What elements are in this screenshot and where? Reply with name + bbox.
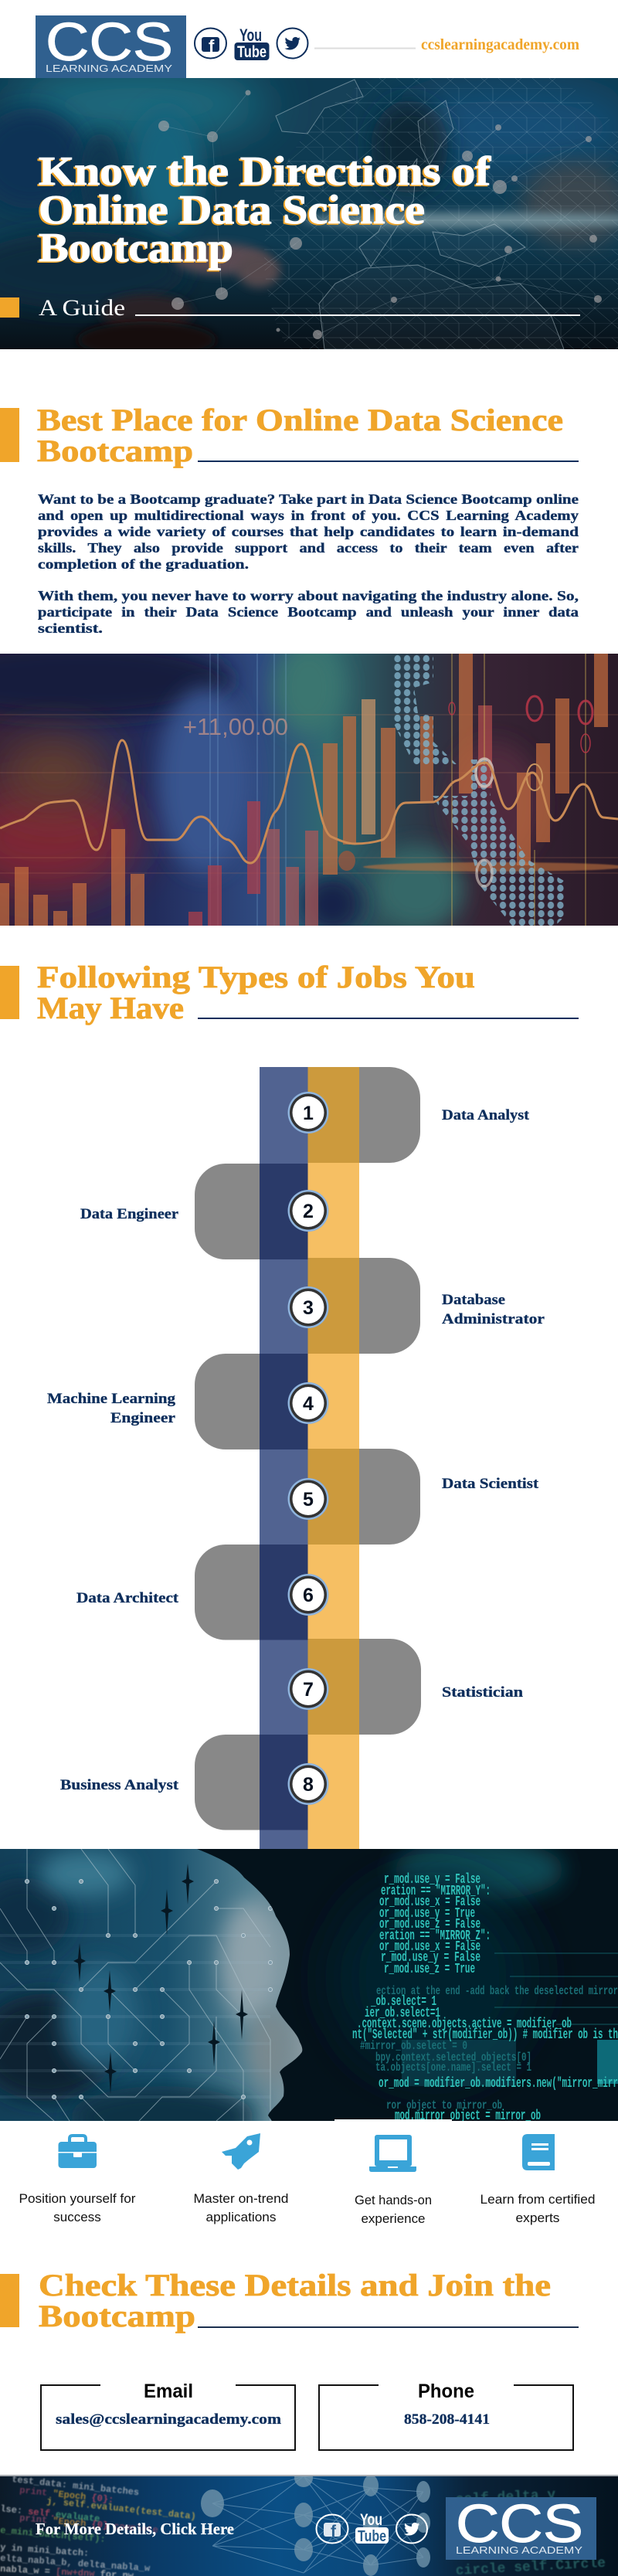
icon: youtube (355, 2511, 389, 2545)
accent bar (0, 408, 19, 462)
footer photo: code and neural network (0, 2469, 618, 2576)
translucent overlays (402, 2040, 516, 2086)
code text: r_mod.use_y = False (384, 1872, 480, 1888)
hero title: Know the Directions of (39, 149, 492, 194)
icon: facebook: f (209, 36, 215, 56)
code text: bpy.context.selected_objects[0] (375, 2051, 531, 2065)
top header bar (36, 12, 579, 78)
benefit: certified experts: Learn from certified (480, 2192, 595, 2207)
step 6: data architect: 6 (303, 1585, 314, 1606)
benefit: master applications: applications (205, 2210, 277, 2224)
step 3: database administrator: 3 (303, 1297, 314, 1319)
heading: following types of jobs: May Have (37, 991, 184, 1025)
bars (0, 654, 608, 926)
benefit: position yourself: success (53, 2210, 101, 2224)
step 3: database administrator: Database (442, 1292, 505, 1308)
step 3: database administrator: Administrator (442, 1311, 545, 1327)
step 2: data engineer: Data Engineer (80, 1206, 179, 1222)
heading: following types of jobs (37, 960, 475, 1025)
code text: _ob.select= 1 (370, 1994, 436, 2010)
footer code text: elta_nabla_b, delta_nabla_w (0, 2553, 151, 2574)
benefit: certified experts: experts (516, 2211, 559, 2225)
second paragraph (38, 588, 579, 636)
logo: CCS Learning Academy: LEARNING ACADEMY (46, 63, 172, 74)
section: jobs heading (0, 960, 579, 1025)
price curve (0, 740, 618, 863)
heading: best place (37, 403, 563, 468)
step 5: data scientist (287, 1476, 539, 1520)
footer code text: lse: self.evaluate (0, 2503, 100, 2525)
icon: twitter (396, 2514, 427, 2544)
step 6: data architect: Data Architect (76, 1590, 179, 1606)
photo: AI head and code (0, 1849, 618, 2121)
code text: or_mod.use_x = False (379, 1939, 480, 1955)
accent bar (0, 966, 19, 1019)
call to action: For More Details, Click Here (36, 2520, 234, 2538)
step 4: machine learning engineer (47, 1382, 329, 1426)
benefit: position yourself: Position yourself for (19, 2191, 136, 2206)
contact box: email: sales@ccslearningacademy.com (56, 2411, 281, 2428)
code text: or_mod.use_y = True (379, 1906, 475, 1922)
footer logo: LEARNING ACADEMY (456, 2544, 582, 2556)
heading: check these details: Bootcamp (39, 2299, 195, 2333)
second paragraph: scientist. (38, 620, 103, 636)
circuit traces (0, 1849, 270, 2121)
intro paragraph: provides a wide variety of courses that help candidates to learn in-demand (38, 524, 579, 539)
code text: ier_ob.select=1 (365, 2006, 440, 2021)
heading: best place: Bootcamp (37, 433, 193, 468)
footer code text: e_mini_batch(self): (0, 2525, 106, 2545)
contact box: phone: Phone (418, 2381, 474, 2402)
step 3: database administrator (287, 1286, 545, 1328)
benefit: master applications (193, 2133, 289, 2224)
central ribbon (260, 1067, 359, 1849)
icon: briefcase (59, 2136, 97, 2168)
code text: or_mod.use_x = False (379, 1895, 480, 1910)
benefit: hands-on: experience (362, 2211, 425, 2226)
step 2: data engineer (80, 1190, 329, 1232)
section: join bootcamp (0, 2268, 579, 2333)
step 7: statistician: 7 (303, 1679, 314, 1701)
code text: eration == "MIRROR_Z": (379, 1929, 491, 1944)
contact box: phone: 858-208-4141 (404, 2411, 490, 2428)
step 2: data engineer: 2 (303, 1201, 314, 1222)
website address: ccslearningacademy.com (421, 36, 579, 53)
footer code text: y in mini_batch: (0, 2542, 90, 2559)
footer code text: print "Epoch {0}: (19, 2485, 114, 2506)
logo: CCS Learning Academy: CCS (46, 12, 173, 72)
step 1: data analyst (287, 1092, 530, 1133)
hero title: Online Data Science (39, 188, 425, 233)
benefits row (19, 2133, 595, 2226)
code text (352, 1872, 618, 2124)
icon: facebook: f (331, 2523, 337, 2540)
footer code text (0, 2474, 606, 2576)
hero title: Bootcamp (37, 227, 232, 272)
accent square (0, 297, 19, 318)
code text: ta.objects[one.name].select = 1 (375, 2061, 531, 2075)
contact box: email: Email (144, 2381, 193, 2402)
hero banner (0, 78, 618, 349)
step 1: data analyst: 1 (303, 1103, 314, 1124)
hero title: Know the Directions of (37, 150, 491, 195)
step 6: data architect (76, 1574, 329, 1616)
icon: rocket (222, 2133, 260, 2170)
code text: ror object to mirror_ob (386, 2099, 502, 2112)
footer code text: self.delta_y (455, 2487, 556, 2508)
chart figure: +11,00.00 (183, 713, 288, 740)
icon: facebook (195, 28, 226, 59)
section: best place (0, 403, 579, 636)
code text: eration == "MIRROR_Y": (381, 1884, 491, 1899)
icon: youtube: You (360, 2511, 382, 2529)
hero title (37, 149, 492, 272)
footer code text: print "Epoch {0} complete (19, 2513, 158, 2536)
contact box: email (41, 2381, 295, 2450)
icon: youtube: Tube (237, 43, 267, 61)
step 8: business analyst (60, 1763, 329, 1805)
sparkles (73, 1864, 248, 2094)
benefit: hands-on (355, 2135, 432, 2226)
step 7: statistician: Statistician (442, 1684, 523, 1701)
icon: twitter (277, 28, 307, 59)
step 8: business analyst: 8 (303, 1774, 314, 1796)
intro paragraph: skills. They also provide support and access to their team even after (38, 540, 579, 556)
icon: facebook (317, 2514, 348, 2544)
benefit: hands-on: Get hands-on (355, 2193, 432, 2207)
accent bar (0, 2274, 19, 2327)
job timeline (47, 1067, 545, 1849)
footer code text: test_data: mini_batches (12, 2474, 140, 2498)
step 1: data analyst: Data Analyst (442, 1107, 530, 1123)
step 5: data scientist: Data Scientist (442, 1476, 539, 1492)
footer logo (446, 2493, 596, 2560)
icon: youtube: You (239, 25, 262, 45)
benefit: position yourself (19, 2136, 136, 2224)
intro paragraph (38, 491, 579, 572)
hero photo: globe and hand (0, 78, 618, 349)
icon: book (522, 2134, 555, 2170)
hero title: Bootcamp (39, 226, 233, 270)
head silhouette (0, 1849, 303, 2148)
intro paragraph: and open up multidirectional ways in front of you. CCS Learning Academy (38, 508, 579, 523)
heading: check these details: Check These Details and Join the (39, 2268, 551, 2302)
intro paragraph: completion of the graduation. (38, 556, 249, 572)
heading: best place: Best Place for Online Data Science (37, 403, 563, 437)
footer logo: CCS (456, 2493, 583, 2554)
footer code text: j, self.evaluate(test_data) (46, 2496, 196, 2522)
contact box: phone (319, 2381, 573, 2450)
footer (0, 2469, 618, 2576)
heading: check these details (39, 2268, 551, 2333)
icon: youtube: Tube (358, 2528, 386, 2545)
code text: #mirror_ob.select = 0 (360, 2039, 467, 2053)
step 5: data scientist: 5 (303, 1489, 314, 1511)
subtitle: A Guide: A Guide (39, 295, 125, 321)
photo: financial data chart (0, 641, 618, 935)
heading: following types of jobs: Following Types of Jobs You (37, 960, 475, 994)
step 4: machine learning engineer: Machine Learning (47, 1391, 176, 1407)
step 8: business analyst: Business Analyst (60, 1777, 179, 1793)
code text: or_mod.use_z = False (379, 1917, 480, 1932)
step 4: machine learning engineer: Engineer (110, 1410, 176, 1426)
icon: youtube (235, 25, 269, 61)
logo: CCS Learning Academy (36, 12, 186, 78)
side tabs (195, 1067, 421, 1830)
intro paragraph: Want to be a Bootcamp graduate? Take part in Data Science Bootcamp online (38, 491, 579, 507)
dot matrix (394, 654, 564, 926)
code text: r_mod.use_y = False (381, 1950, 480, 1966)
second paragraph: participate in their Data Science Bootcamp and unleash your inner data (38, 604, 579, 620)
hero title: Online Data Science (37, 189, 423, 233)
benefit: certified experts (480, 2134, 595, 2225)
code text: r_mod.use_z = True (384, 1962, 475, 1977)
step 7: statistician (287, 1668, 523, 1710)
step 4: machine learning engineer: 4 (303, 1393, 314, 1415)
icon: laptop (369, 2135, 416, 2172)
second paragraph: With them, you never have to worry about navigating the industry alone. So, (38, 588, 579, 603)
benefit: master applications: Master on-trend (193, 2191, 289, 2206)
